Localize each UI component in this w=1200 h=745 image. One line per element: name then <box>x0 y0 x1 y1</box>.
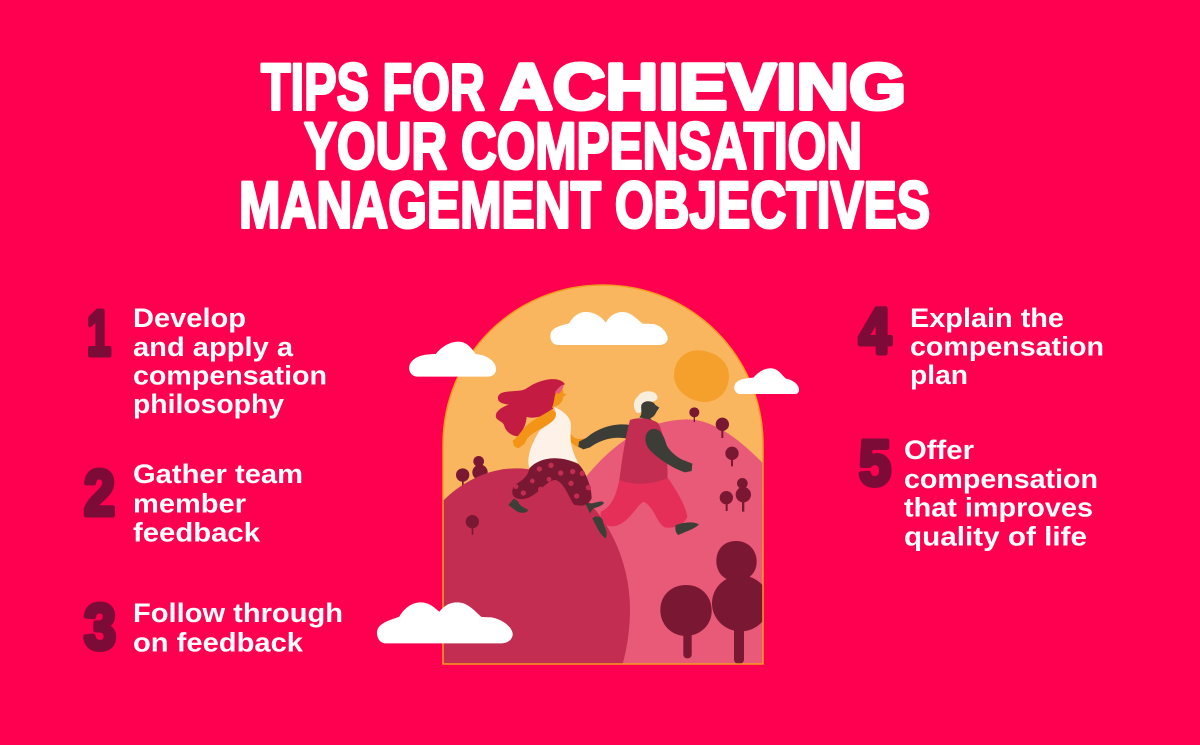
tip 4: Explain the <box>910 303 1064 333</box>
tip 5: compensation <box>904 464 1098 494</box>
man hair <box>634 391 658 413</box>
tip 1: 1 <box>87 297 111 369</box>
arch sky <box>443 285 763 664</box>
tip 3: Follow through <box>133 598 343 628</box>
woman headband <box>555 384 564 394</box>
man right shoe <box>675 522 699 535</box>
front hill <box>442 468 630 665</box>
trouser dots <box>514 463 591 499</box>
clouds <box>377 312 799 643</box>
man figure <box>578 391 699 538</box>
tip 4 <box>859 295 1104 390</box>
man near arm <box>645 429 692 472</box>
man trousers <box>601 478 687 528</box>
sun <box>674 350 729 402</box>
tip 1: compensation <box>133 360 327 390</box>
cloud: right <box>734 368 799 394</box>
woman face <box>552 389 567 408</box>
title: TIPS FOR <box>261 50 485 124</box>
tip 3: 3 <box>84 591 116 663</box>
tip 5: quality of life <box>904 522 1087 552</box>
woman right shoe <box>585 502 604 513</box>
tip 3 <box>84 591 343 663</box>
tip 1 <box>87 297 327 419</box>
back hill <box>583 419 764 665</box>
title: MANAGEMENT OBJECTIVES <box>239 168 930 242</box>
tip 5: that improves <box>904 492 1093 522</box>
cloud: bottom <box>377 602 513 643</box>
large trees <box>660 541 769 664</box>
cloud: top <box>550 312 668 345</box>
tip 1: Develop <box>133 303 246 333</box>
tip 5: Offer <box>904 435 974 465</box>
illustration: arch landscape <box>377 285 799 665</box>
tip 4: plan <box>910 360 968 390</box>
tip 2: member <box>133 488 246 518</box>
tip 3: on feedback <box>133 628 303 658</box>
man left shoe <box>592 516 607 538</box>
back trees <box>456 407 751 512</box>
woman shirt <box>528 407 578 468</box>
woman hair <box>496 380 564 436</box>
woman figure <box>496 380 604 513</box>
hills and trees <box>442 350 769 665</box>
tip 2: Gather team <box>133 459 303 489</box>
title: ACHIEVING <box>500 50 906 123</box>
title: YOUR COMPENSATION <box>304 108 862 182</box>
tip 4: compensation <box>910 332 1104 362</box>
tip 2: 2 <box>84 457 115 529</box>
woman right arm <box>568 433 583 448</box>
tip 2: feedback <box>133 518 260 548</box>
tip 4: 4 <box>859 295 891 367</box>
tip 5: 5 <box>859 427 891 499</box>
woman left shoe <box>508 498 528 513</box>
man back arm <box>578 424 630 449</box>
woman left arm <box>513 409 561 448</box>
man head <box>639 401 659 421</box>
tip 5 <box>859 427 1098 552</box>
arch outline <box>443 285 763 664</box>
man shirt <box>619 418 668 484</box>
tip 1: and apply a <box>133 332 293 362</box>
tip 1: philosophy <box>133 389 284 419</box>
cloud: left <box>409 342 496 377</box>
woman trousers <box>512 458 592 506</box>
tip 2 <box>84 457 303 548</box>
title <box>239 50 930 242</box>
front small tree <box>466 515 479 535</box>
